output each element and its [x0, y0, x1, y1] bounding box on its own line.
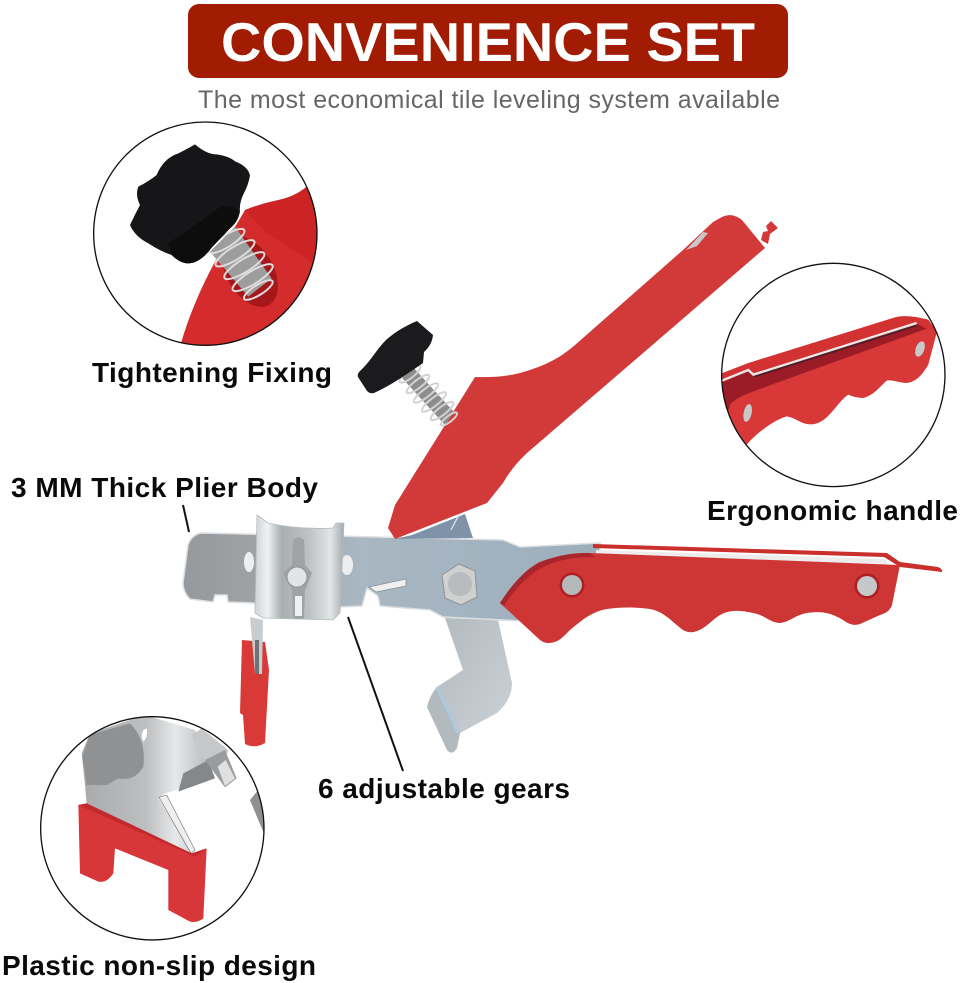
wing nut: [283, 538, 312, 619]
red lever: [388, 215, 765, 539]
pliers: lower body and handle: [183, 533, 942, 753]
lever tab: [761, 221, 778, 244]
label: tightening fixing: Tightening Fixing: [92, 357, 332, 388]
rear rail: [593, 544, 942, 572]
knob: [358, 321, 433, 393]
pin detail: [369, 579, 406, 592]
knob and spring: [358, 321, 459, 428]
detail circle: tightening fixing: [94, 122, 320, 347]
label: plastic non-slip design: Plastic non-slip design: [2, 950, 316, 981]
red grip: [500, 553, 900, 643]
detail circle: plastic non-slip design: [41, 715, 267, 940]
title banner: CONVENIENCE SET: [221, 11, 755, 73]
plier steel body: [183, 533, 600, 621]
leader line: gears: [348, 617, 403, 771]
grip screws: [560, 572, 880, 598]
subtitle: The most economical tile leveling system available: [198, 86, 780, 114]
slot highlights: [244, 552, 353, 575]
red plastic foot on stem: [240, 617, 269, 746]
label: gears: 6 adjustable gears: [318, 773, 570, 804]
label: plier body: 3 MM Thick Plier Body: [11, 472, 318, 503]
leader line: plier body: [183, 505, 189, 532]
detail circle: ergonomic handle: [720, 263, 945, 487]
pliers: upper handle: [388, 215, 778, 539]
label: ergonomic handle: Ergonomic handle: [707, 495, 958, 526]
sliding bracket: [255, 515, 344, 620]
spring: [397, 363, 459, 428]
hex bolt: [442, 564, 477, 605]
hook jaw: [427, 618, 512, 753]
